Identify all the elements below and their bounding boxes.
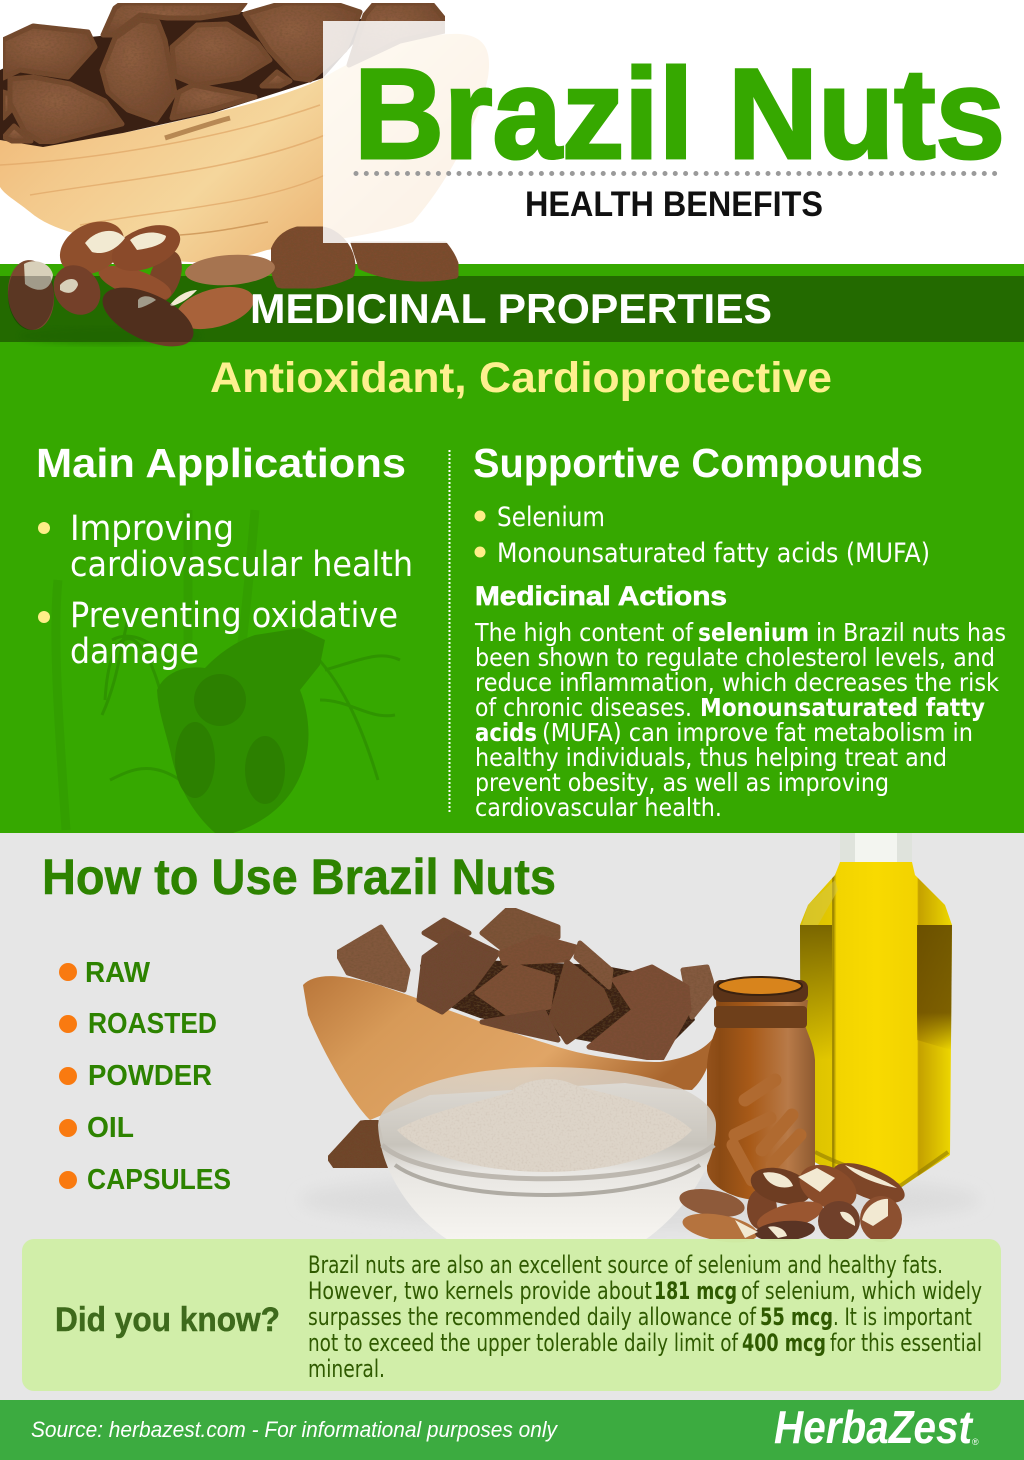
main applications heading: Main Applications [36,440,406,486]
wooden bowl [0,34,489,262]
compound bullet: selenium: Selenium [497,502,605,533]
footer bar [0,1400,1024,1460]
did you know paragraph: However, two kernels provide about [308,1277,652,1305]
did you know paragraph: mineral. [308,1355,385,1383]
title: Brazil Nuts [354,43,1005,186]
usage: roasted: ROASTED [88,1008,217,1040]
dark band [0,276,1024,342]
did you know paragraph: surpasses the recommended daily allowance of [308,1303,756,1331]
green properties panel [0,264,1024,833]
Brazil nuts in front of the bowl [8,222,458,346]
medicinal actions paragraph: (MUFA) can improve fat metabolism in [542,718,973,747]
medicinal actions paragraph: in Brazil nuts has [816,618,1006,647]
subtitle: HEALTH BENEFITS [525,185,823,224]
did you know panel [22,1239,1001,1391]
did you know paragraph: for this essential [830,1329,982,1357]
application bullet: improving cardiovascular health: cardiovascular health [70,545,413,585]
shell beneath bowl [328,1120,388,1168]
translucent title panel [323,21,1024,243]
application bullet: preventing oxidative damage: Preventing oxidative [70,596,398,636]
properties subheading: Antioxidant, Cardioprotective [210,354,832,402]
medicinal actions paragraph: acids [475,718,537,747]
application bullet: preventing oxidative damage [38,596,398,672]
did you know label: Did you know? [55,1301,280,1339]
glass bowl of powder [378,1067,716,1240]
usage: oil [59,1112,134,1144]
shell-on almonds [5,211,276,359]
did you know paragraph: 400 mcg [742,1329,826,1357]
application bullet: preventing oxidative damage: damage [70,632,199,672]
wooden serving bowl [303,976,714,1120]
dark gaps between nuts [0,12,370,147]
bowl knot [165,118,230,138]
ground shadow [20,327,200,345]
band shade on front almonds [8,276,194,342]
top photo: wooden bowl of Brazil nuts [0,3,489,262]
usage: capsules: CAPSULES [87,1164,231,1196]
usage list [59,957,231,1196]
heart illustration [56,510,400,833]
dotted divider [356,171,1000,176]
usage: oil: OIL [87,1112,134,1144]
amber capsule jar [707,977,815,1200]
registered mark: ® [972,1437,979,1447]
medicinal actions paragraph: prevent obesity, as well as improving [475,768,889,797]
gray usage panel [0,833,1024,1400]
soft floor shadows [300,1172,980,1228]
medicinal actions paragraph: The high content of [474,618,694,647]
source credit: Source: herbazest.com - For informational purposes only [31,1417,559,1442]
supportive compounds heading: Supportive Compounds [473,440,923,486]
medicinal actions paragraph: of chronic diseases. [475,693,692,722]
did you know paragraph: . It is important [833,1303,972,1331]
medicinal actions paragraph [474,618,1006,822]
main applications column [36,440,413,672]
compound bullet: MUFA: Monounsaturated fatty acids (MUFA) [497,538,930,569]
did you know paragraph [308,1251,982,1383]
shelled nuts in bowl [337,908,714,1060]
medicinal actions paragraph: selenium [698,618,809,647]
how to use heading: How to Use Brazil Nuts [42,849,556,905]
HerbaZest logo: HerbaZest [774,1401,973,1453]
Brazil nuts pile at bottom right [677,1155,910,1247]
supportive compounds column [473,440,1006,822]
did you know paragraph: 181 mcg [654,1277,737,1305]
did you know paragraph: not to exceed the upper tolerable daily limit of [308,1329,738,1357]
medicinal actions paragraph: Monounsaturated fatty [700,693,985,722]
whole shells at right [271,227,458,288]
usage: powder: POWDER [88,1060,212,1092]
dotted column divider [448,450,450,814]
exposed white kernels [24,231,197,308]
oil bottle [800,833,952,1188]
application bullet: improving cardiovascular health [38,509,413,585]
medicinal actions paragraph: healthy individuals, thus helping treat and [475,743,947,772]
did you know paragraph: 55 mcg [760,1303,833,1331]
medicinal actions heading: Medicinal Actions [475,581,727,611]
shelled nuts in the bowl [3,3,445,144]
application bullet: improving cardiovascular health: Improving [70,509,234,549]
product photo group [300,833,980,1247]
medicinal actions paragraph: cardiovascular health. [475,793,722,822]
medicinal properties heading: MEDICINAL PROPERTIES [250,285,772,332]
usage: raw: RAW [85,957,151,989]
